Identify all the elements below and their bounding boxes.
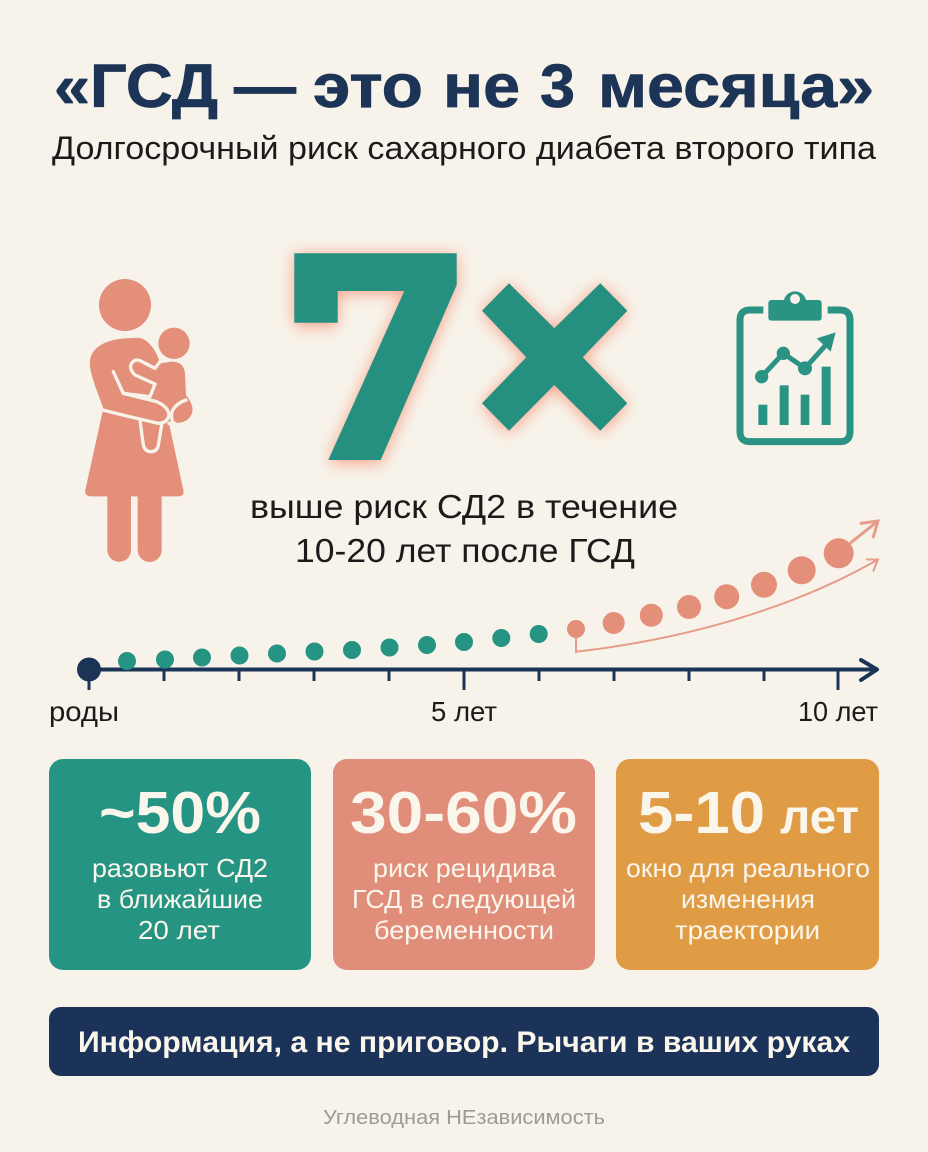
lower trend arrow xyxy=(576,560,878,652)
banner xyxy=(49,1007,879,1076)
card: 5-10 years: окно для реального xyxy=(626,853,870,883)
risk description xyxy=(250,488,678,569)
card: 30-60%: беременности xyxy=(374,915,554,945)
axis with ticks xyxy=(89,660,877,690)
card: 5-10 years: лет xyxy=(780,791,859,844)
title xyxy=(54,52,874,120)
icon: clipboard with rising chart xyxy=(740,291,850,442)
axis label: birth: роды xyxy=(49,696,119,727)
card: 30-60%: 30-60% xyxy=(350,780,577,846)
axis label: 5 years: 5 лет xyxy=(431,696,497,727)
upper trend arrow xyxy=(850,521,878,543)
salmon dots xyxy=(567,538,854,638)
card: 30-60%: ГСД в следующей xyxy=(352,884,576,914)
card: 5-10 years: 5-10 xyxy=(638,780,765,846)
card: about 50%: в ближайшие xyxy=(97,884,263,914)
title: 3 xyxy=(540,52,575,120)
subtitle: Долгосрочный риск сахарного диабета второго типа xyxy=(52,130,876,166)
risk description: 10-20 лет после ГСД xyxy=(295,532,635,569)
title: это xyxy=(313,52,423,120)
card: 30-60%: риск рецидива xyxy=(373,853,557,883)
big figure: 7× xyxy=(294,253,627,463)
title: месяца» xyxy=(598,52,874,120)
title: «ГСД xyxy=(54,52,218,120)
card: 5-10 years: траектории xyxy=(675,915,820,945)
card: about 50%: 20 лет xyxy=(138,915,220,945)
card: 5-10 years xyxy=(616,759,879,970)
icon: mother holding baby xyxy=(85,279,193,562)
footer: Углеводная НЕзависимость xyxy=(323,1107,605,1129)
card: about 50%: разовьют СД2 xyxy=(92,853,268,883)
risk description: выше риск СД2 в течение xyxy=(250,488,678,525)
title: — xyxy=(234,52,296,120)
banner: Информация, а не приговор. Рычаги в ваших руках xyxy=(78,1026,850,1059)
card: 30-60% xyxy=(333,759,595,970)
start point xyxy=(77,658,101,682)
title: не xyxy=(443,52,520,120)
timeline xyxy=(49,521,878,727)
teal dots xyxy=(118,625,548,670)
card: 5-10 years: изменения xyxy=(681,884,815,914)
card: about 50%: ~50% xyxy=(99,780,261,846)
card: about 50% xyxy=(49,759,311,970)
axis label: 10 years: 10 лет xyxy=(798,696,878,727)
